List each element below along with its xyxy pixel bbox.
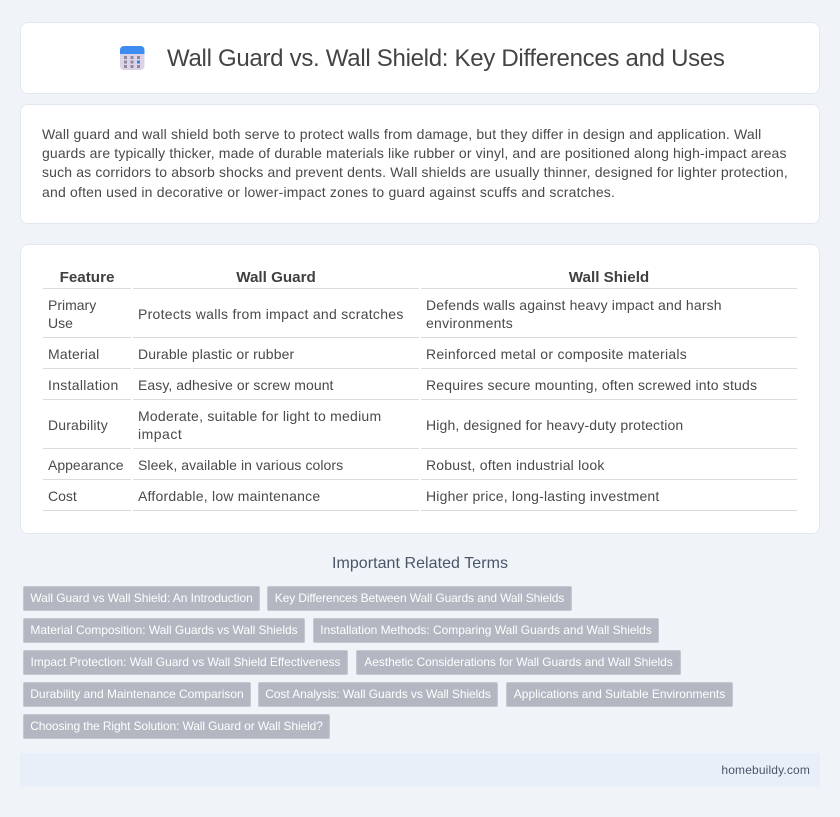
- title: Wall Guard vs. Wall Shield: Key Differences and Uses: [167, 45, 725, 72]
- row: material: Reinforced metal or composite materials: [426, 346, 687, 362]
- row: durability: Durability: [48, 417, 108, 433]
- header card: [20, 22, 820, 94]
- related terms tags: Key Differences Between Wall Guards and Wall Shields: [275, 591, 564, 605]
- row: cost: Affordable, low maintenance: [138, 488, 320, 504]
- footer source: homebuildy.com: [721, 763, 810, 777]
- row: installation: [48, 377, 757, 393]
- intro text: guards are typically thicker, made of durable materials like rubber or vinyl, and are positioned along high-impact areas: [42, 145, 787, 161]
- icon: calendar: [120, 46, 144, 70]
- related terms tags: [23, 586, 733, 739]
- table headers: [60, 269, 649, 286]
- row: primary use: Protects walls from impact and scratches: [138, 306, 404, 322]
- row: material: [48, 346, 687, 362]
- row: installation: Requires secure mounting, often screwed into studs: [426, 377, 757, 393]
- row: appearance: [48, 457, 605, 473]
- comparison table card: [20, 244, 820, 534]
- row: installation: Installation: [48, 377, 119, 393]
- table headers: Feature: [60, 269, 114, 286]
- row: primary use: Use: [48, 315, 73, 331]
- row: durability: High, designed for heavy-duty protection: [426, 417, 683, 433]
- footer: [20, 753, 820, 787]
- related terms tags: Installation Methods: Comparing Wall Guards and Wall Shields: [320, 623, 652, 637]
- related terms tags: Wall Guard vs Wall Shield: An Introduction: [30, 591, 253, 605]
- related terms tags: Applications and Suitable Environments: [514, 687, 725, 701]
- intro card: [20, 104, 820, 224]
- row: cost: Higher price, long-lasting investment: [426, 488, 659, 504]
- related terms tags: Cost Analysis: Wall Guards vs Wall Shields: [265, 687, 491, 701]
- row: material: Durable plastic or rubber: [138, 346, 294, 362]
- row: durability: Moderate, suitable for light to medium: [138, 408, 381, 424]
- table headers: Wall Shield: [569, 269, 649, 286]
- row: cost: [48, 488, 660, 504]
- row: durability: [48, 408, 683, 442]
- related terms tags: Aesthetic Considerations for Wall Guards and Wall Shields: [364, 655, 673, 669]
- related terms tags: Material Composition: Wall Guards vs Wall Shields: [30, 623, 298, 637]
- intro text: [42, 126, 788, 200]
- intro text: Wall guard and wall shield both serve to protect walls from damage, but they differ in design and application. Wall: [42, 126, 761, 142]
- row: durability: impact: [138, 426, 182, 442]
- row: appearance: Sleek, available in various colors: [138, 457, 343, 473]
- row: primary use: [48, 297, 722, 331]
- table headers: Wall Guard: [236, 269, 316, 286]
- intro text: and often used in decorative or lower-impact zones to guard against scuffs and scratches.: [42, 184, 615, 200]
- intro text: such as corridors to absorb shocks and prevent dents. Wall shields are usually thinner, designed for lighter protection,: [42, 164, 788, 180]
- row: installation: Easy, adhesive or screw mount: [138, 377, 334, 393]
- related terms tags: Choosing the Right Solution: Wall Guard or Wall Shield?: [30, 719, 323, 733]
- row: primary use: environments: [426, 315, 513, 331]
- related terms tags: Impact Protection: Wall Guard vs Wall Shield Effectiveness: [30, 655, 341, 669]
- row: primary use: Primary: [48, 297, 96, 313]
- related terms heading: Important Related Terms: [332, 555, 508, 572]
- row: material: Material: [48, 346, 99, 362]
- row: cost: Cost: [48, 488, 77, 504]
- row: appearance: Appearance: [48, 457, 124, 473]
- row: primary use: Defends walls against heavy impact and harsh: [426, 297, 722, 313]
- related terms tags: Durability and Maintenance Comparison: [30, 687, 244, 701]
- row: appearance: Robust, often industrial look: [426, 457, 605, 473]
